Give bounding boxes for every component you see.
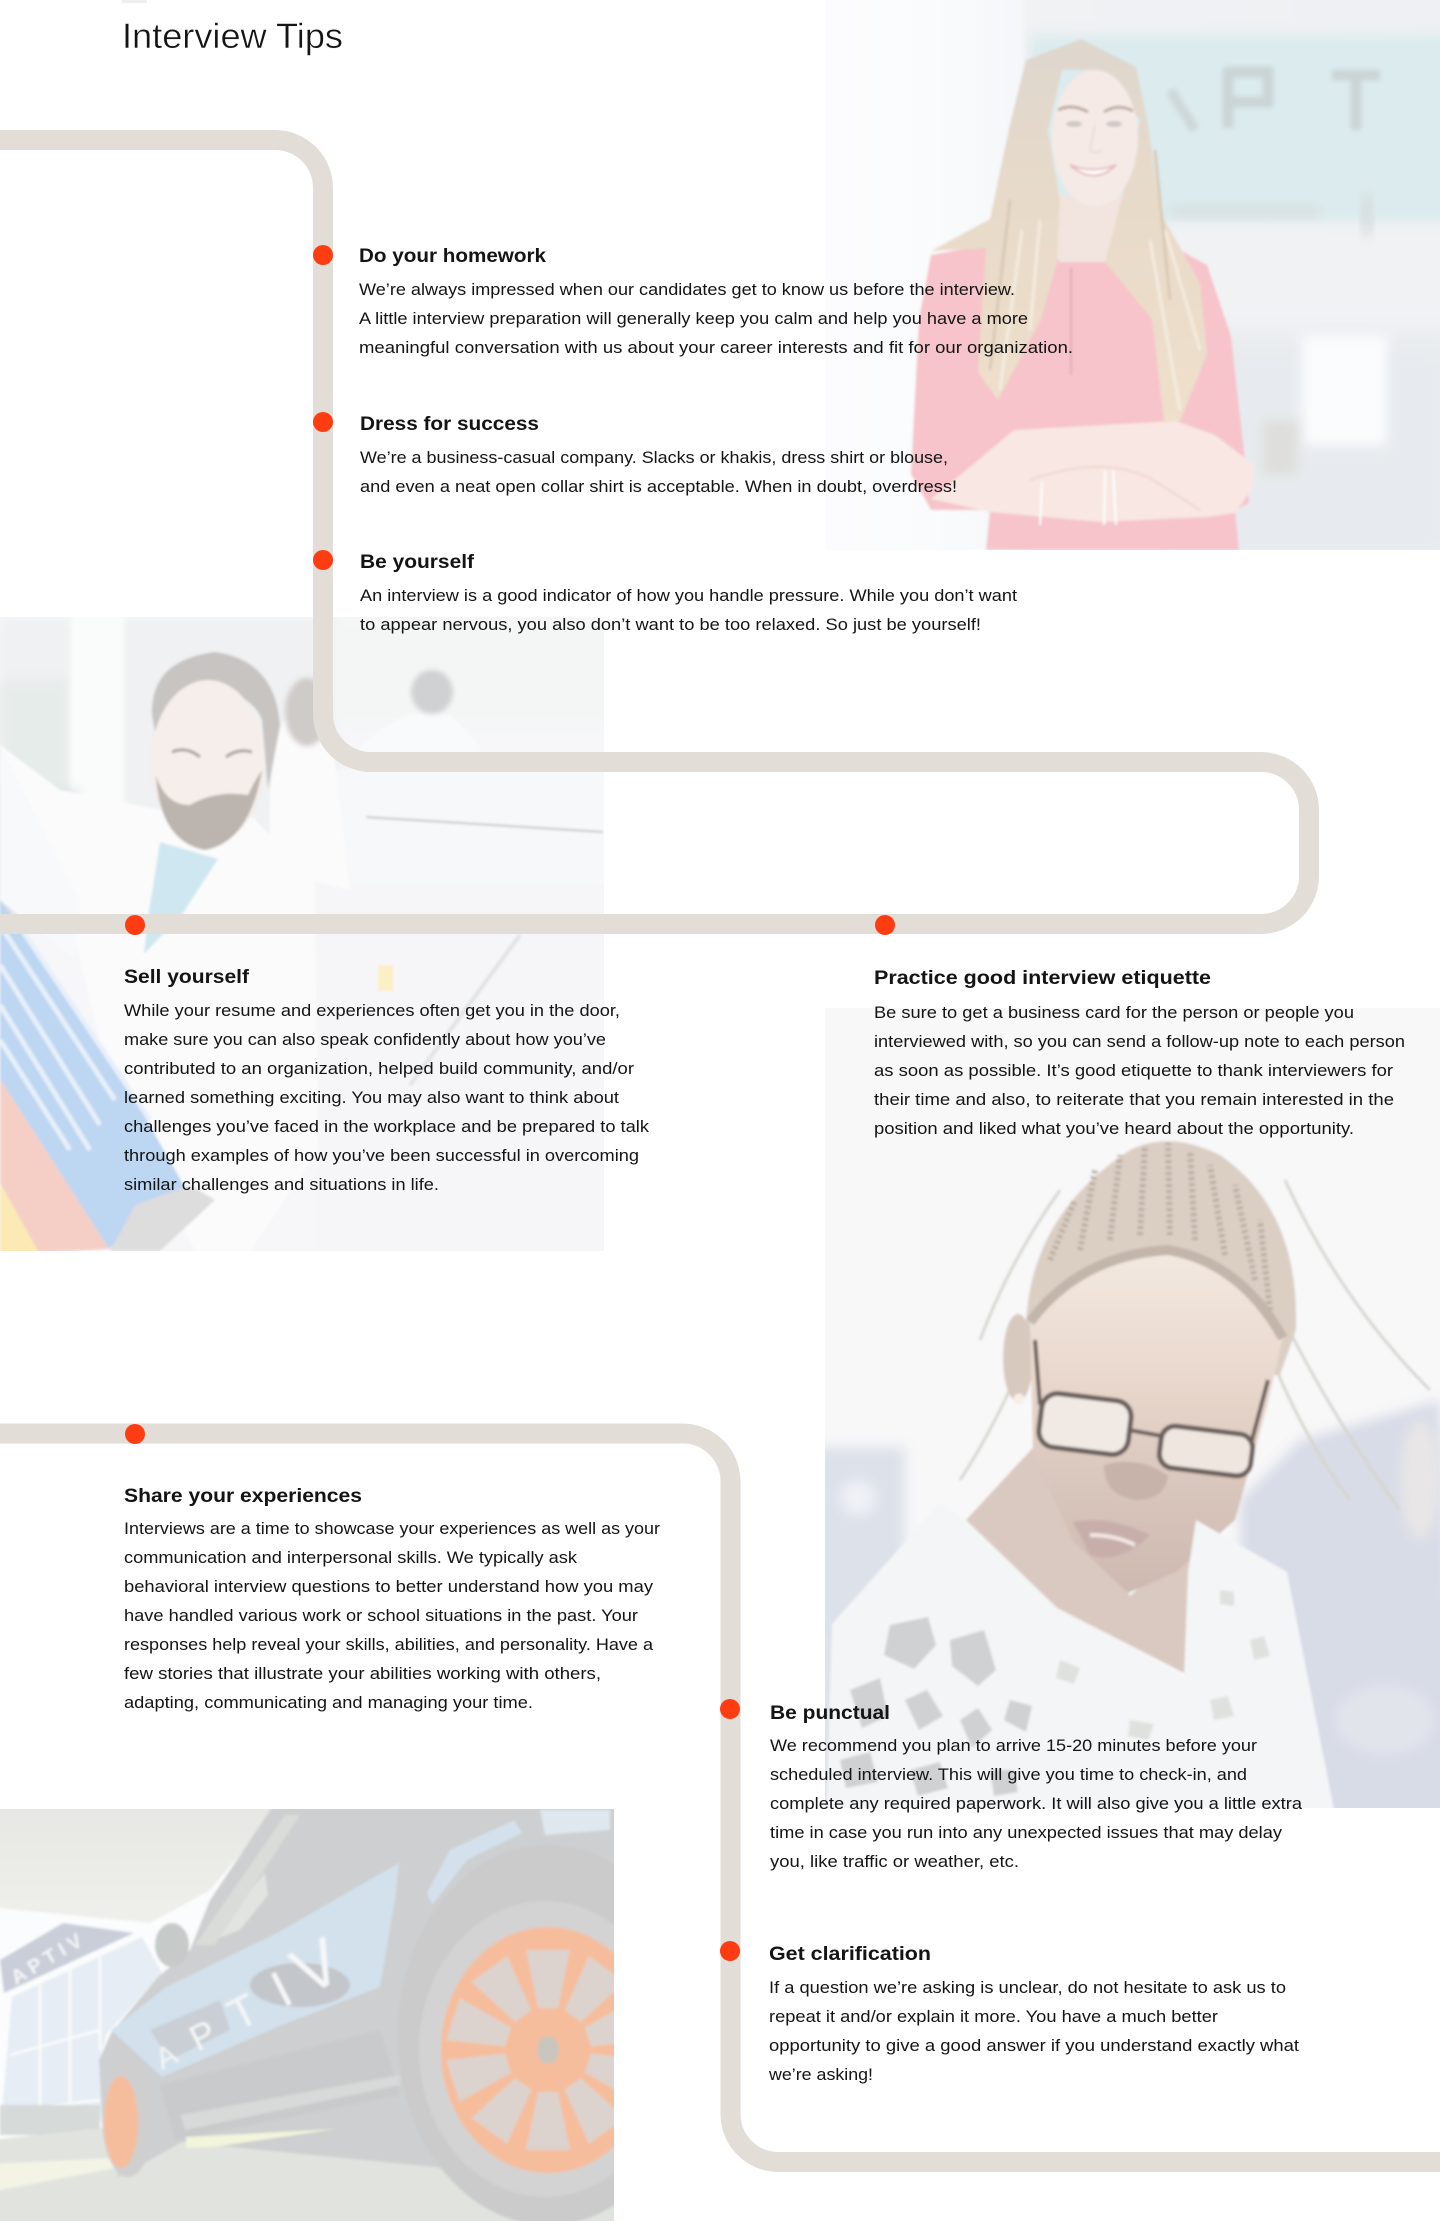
body text: time in case you run into any unexpected issues that may delay [770,1824,1283,1842]
heading: Dress for success [360,414,539,435]
tip: Be punctual [770,1703,1303,1871]
photo: black car with orange wheels: APTIV [7,1927,90,1989]
heading: Share your experiences [124,1486,362,1507]
body text [124,1520,661,1712]
tip: Share your experiences [124,1486,661,1712]
tip: Sell yourself [124,967,650,1194]
body text: repeat it and/or explain it more. You have a much better [769,2008,1219,2026]
body text: interviewed with, so you can send a follow-up note to each person [874,1033,1405,1051]
body text: meaningful conversation with us about your career interests and fit for our organization. [359,339,1073,357]
photo: smiling woman in red dress [910,0,1440,550]
body text: opportunity to give a good answer if you understand exactly what [769,2037,1299,2055]
heading: Sell yourself [124,967,250,988]
top accent tab [122,0,147,3]
body text: position and liked what you’ve heard about the opportunity. [874,1120,1354,1138]
heading: Practice good interview etiquette [874,968,1211,989]
body text: we’re asking! [768,2066,873,2084]
tip: Be yourself [360,552,1017,634]
tip: Dress for success [360,414,957,496]
body text: We’re a business-casual company. Slacks or khakis, dress shirt or blouse, [360,449,948,467]
body text: through examples of how you’ve been successful in overcoming [124,1147,639,1165]
tip: Practice good interview etiquette [874,968,1405,1138]
body text: as soon as possible. It’s good etiquette to thank interviewers for [874,1062,1394,1080]
body text: scheduled interview. This will give you time to check-in, and [770,1766,1247,1784]
body text: challenges you’ve faced in the workplace and be prepared to talk [124,1118,650,1136]
timeline path: upper route [0,140,1309,924]
body text: We recommend you plan to arrive 15-20 minutes before your [770,1737,1258,1755]
body text: An interview is a good indicator of how you handle pressure. While you don’t want [360,587,1017,605]
body text [770,1737,1303,1871]
body text: adapting, communicating and managing your time. [124,1694,533,1712]
body text [359,281,1073,357]
body text [360,587,1017,634]
body text: learned something exciting. You may also want to think about [124,1089,619,1107]
body text [124,1002,650,1194]
body text: responses help reveal your skills, abilities, and personality. Have a [124,1636,654,1654]
tip: Get clarification [768,1944,1299,2084]
timeline dots [125,245,895,1961]
timeline path: lower route [0,1433,1440,2162]
body text: Be sure to get a business card for the person or people you [874,1004,1354,1022]
body text: complete any required paperwork. It will also give you a little extra [770,1795,1303,1813]
photo: lab technician in white coat [0,600,624,1270]
body text: If a question we’re asking is unclear, do not hesitate to ask us to [769,1979,1286,1997]
body text: and even a neat open collar shirt is acceptable. When in doubt, overdress! [360,478,957,496]
body text [360,449,957,496]
body text: few stories that illustrate your abilities working with others, [124,1665,601,1683]
title: Interview Tips [122,17,343,56]
body text: to appear nervous, you also don’t want to be too relaxed. So just be yourself! [360,616,981,634]
heading: Be yourself [360,552,475,573]
body text [874,1004,1405,1138]
body text: similar challenges and situations in life. [124,1176,439,1194]
body text: their time and also, to reiterate that you remain interested in the [874,1091,1394,1109]
body text: We’re always impressed when our candidates get to know us before the interview. [359,281,1015,299]
body text: While your resume and experiences often get you in the door, [124,1002,620,1020]
heading: Be punctual [770,1703,890,1724]
body text: have handled various work or school situations in the past. Your [124,1607,639,1625]
heading: Get clarification [769,1944,931,1965]
body text: you, like traffic or weather, etc. [770,1853,1019,1871]
photo: black car with orange wheels [0,1809,614,2221]
heading: Do your homework [359,246,546,267]
body text: A little interview preparation will generally keep you calm and help you have a more [359,310,1028,328]
photo: woman with braids and glasses [825,1139,1440,1808]
body text: behavioral interview questions to better understand how you may [124,1578,654,1596]
body text [768,1979,1299,2084]
photo: black car with orange wheels: APTIV [135,1923,352,2082]
body text: make sure you can also speak confidently about how you’ve [124,1031,606,1049]
tip: Do your homework [359,246,1073,357]
body text: contributed to an organization, helped build community, and/or [124,1060,635,1078]
body text: Interviews are a time to showcase your experiences as well as your [124,1520,661,1538]
body text: communication and interpersonal skills. We typically ask [124,1549,578,1567]
